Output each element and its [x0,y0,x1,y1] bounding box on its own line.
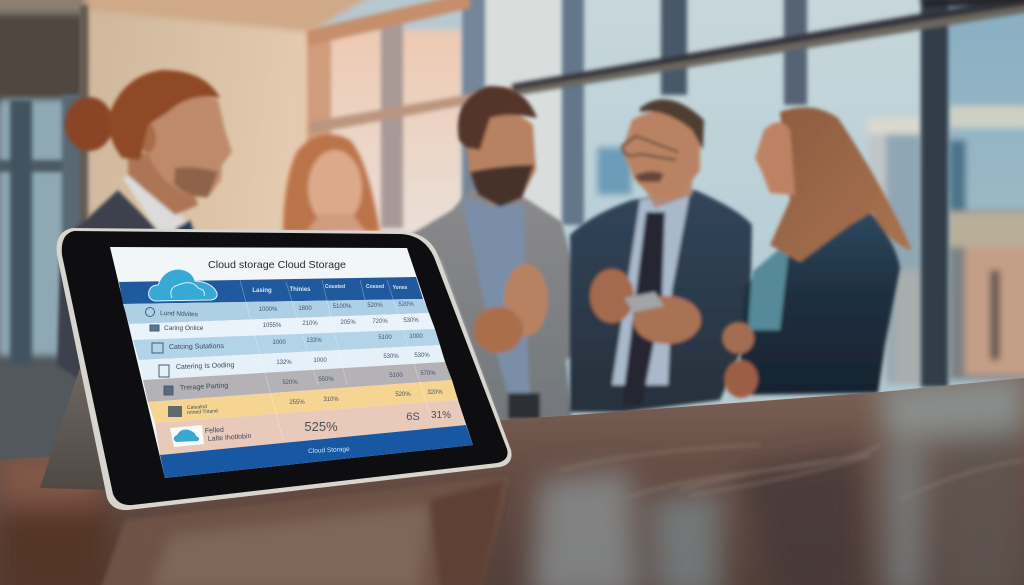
horizontal band [512,0,1024,96]
table values: 520% [367,303,383,309]
tie knot [176,220,194,232]
table values: 570% [420,371,436,377]
table values: 520% [395,392,411,398]
table values: 255% [289,400,305,406]
shirt [462,198,530,395]
top frame edge right [919,0,1024,8]
hair [108,70,220,160]
cool panes [565,0,925,390]
tablet stand [40,368,110,490]
table values: 1000 [409,334,423,340]
row icons [146,308,182,417]
header labels: Cossed [366,284,384,290]
suit [570,190,752,412]
row labels: rotned Tritand [187,408,218,416]
hands and phone [590,269,634,323]
hands [722,322,754,354]
screen base [110,247,473,478]
row 1 [123,299,429,324]
person: man with glasses holding phone [570,99,752,412]
table values: 530% [383,354,399,360]
person: man with hair bun [57,70,232,380]
footer band [160,425,473,478]
row 6 [148,380,458,423]
table values: 5100 [389,373,403,379]
wood grain [560,445,1024,500]
city buildings [868,118,922,134]
glasses [622,136,678,160]
table values: 5100% [333,304,352,310]
table values: 132% [276,360,292,366]
hair [770,107,912,262]
table values: 5100 [378,335,392,341]
row labels [160,310,252,443]
row labels: Felled [205,427,224,435]
face [755,122,795,195]
footer label: Cloud Storage [308,446,350,455]
tablet [57,228,512,510]
neck [640,160,692,208]
table values: 530% [403,318,419,324]
table values [259,302,443,406]
row labels: Catealnd [187,404,207,411]
beard [174,167,218,197]
row 4 [139,345,445,380]
cloud logo [149,269,217,301]
table values: 1000 [272,340,286,346]
row labels: Trerage Parting [180,382,229,392]
hair [640,99,704,150]
table values: 520% [398,302,414,308]
row 2 [129,313,435,340]
table header band [119,277,423,304]
table values: 133% [306,338,322,344]
head [145,97,232,197]
tablet reflection [100,476,510,585]
head [464,110,536,205]
table values: 1055% [263,323,282,329]
row labels: Catering Is Ooding [176,362,235,371]
large values [304,410,451,434]
header labels [252,284,408,294]
table values: 1800 [298,306,312,312]
table values: 1000 [313,358,327,364]
warm frames [307,30,331,240]
tablet body [57,228,512,510]
beard [470,165,534,207]
left window frames [0,160,83,172]
table values: 1000% [259,307,278,313]
wooden table [0,370,1024,585]
large values: 6S [406,411,420,423]
ear [140,123,156,153]
table values: 210% [302,321,318,327]
screen title: Cloud storage Cloud Storage [208,259,346,271]
hair bun [65,97,113,151]
table values: 520% [282,380,298,386]
header labels: Cousted [325,284,345,290]
person: man in grey suit [405,86,592,425]
column lines [240,280,432,440]
header labels: Lasing [252,288,272,294]
suit [57,190,192,380]
clasped hands [504,264,548,336]
row labels: Caring Onlice [164,325,204,332]
window reflections on table [0,375,1024,585]
row labels: Lund Ndvites [160,310,199,318]
header labels: Thinies [289,287,311,293]
window frames [0,0,1024,387]
person: woman in dark jacket [722,107,912,398]
ceiling [84,0,470,32]
table values: 530% [414,353,430,359]
head [622,111,700,199]
white icon box with cloud [170,425,204,447]
tablet bezel [62,231,508,505]
left dark window [0,0,85,500]
table values: 720% [372,319,388,325]
table values: 550% [318,377,334,383]
table values: 205% [340,320,356,326]
table values: 320% [427,390,443,396]
moustache [634,171,664,182]
row 5 [143,362,452,402]
suit [405,190,592,425]
large values: 31% [431,410,451,421]
shirt [612,192,690,385]
person: woman with auburn hair [283,134,380,232]
table values: 310% [323,397,339,403]
shirt collar [123,172,187,232]
tie [622,212,665,405]
row labels: Catcing Sutations [169,343,224,351]
hair [458,86,537,150]
trousers [508,393,540,419]
cool mullions [562,0,584,225]
header labels: Yones [393,285,408,291]
teal blouse [748,240,790,330]
warm panes [310,30,465,235]
row 3 [133,329,440,360]
wall [84,0,310,240]
row labels: Lalte Ihotlobin [208,433,252,443]
neck [128,150,198,215]
jacket [738,212,900,395]
row 7 [155,400,466,455]
large values: 525% [304,419,338,434]
